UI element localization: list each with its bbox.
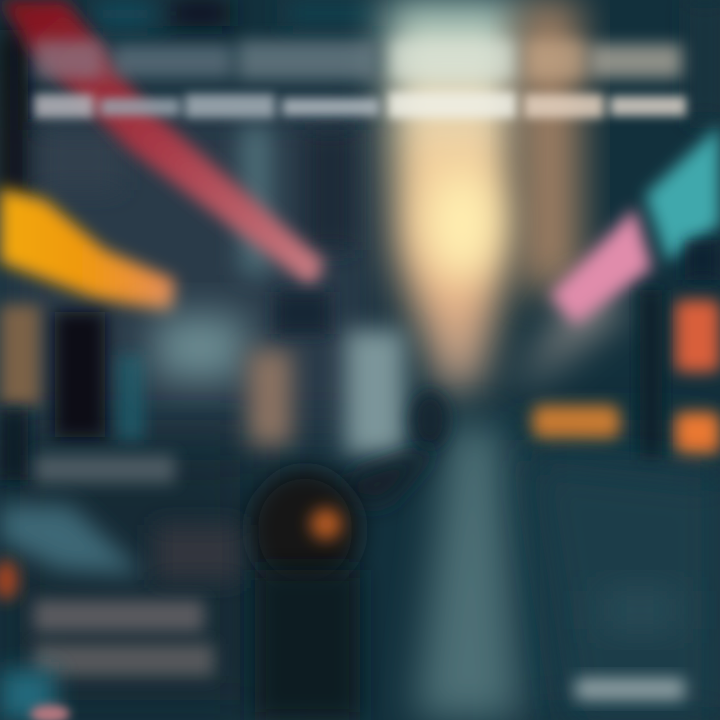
red diagonal stripe [0,0,325,288]
right orange lights [532,290,720,460]
road [415,425,720,720]
building columns top [0,0,720,275]
pink and teal signs [550,125,720,325]
silhouette figure [250,392,448,720]
bottom right label [575,678,685,700]
amber awning [0,188,175,312]
central light glow [385,0,630,395]
crowd middle [248,292,405,455]
title text band [34,40,686,118]
left storefront [0,305,245,480]
left lower panel text blocks [0,455,240,720]
